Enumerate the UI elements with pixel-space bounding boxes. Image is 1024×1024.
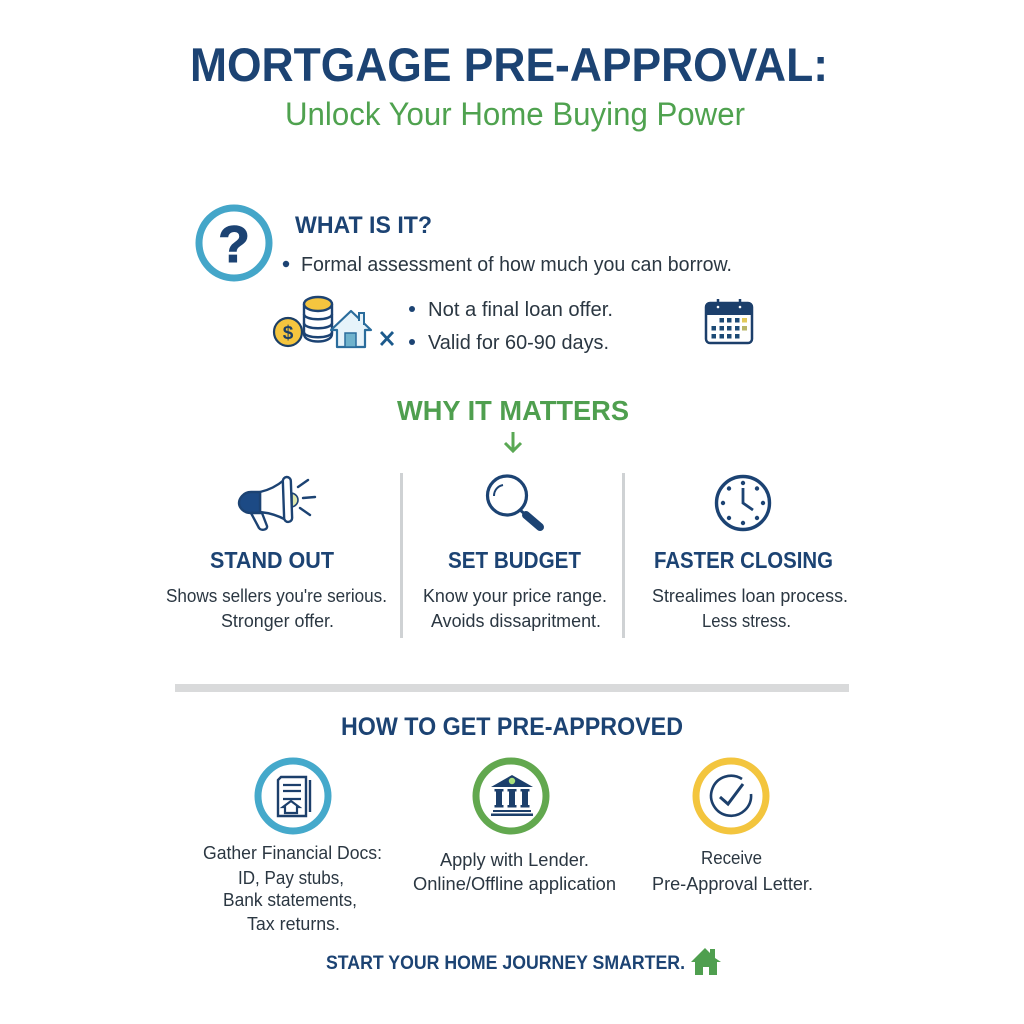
text: apply with lender: Apply with Lender. [440, 850, 589, 870]
icon: clock [716, 476, 770, 530]
step 1: gather documents [203, 761, 382, 934]
bullet: valid for 60-90 days: Valid for 60-90 days. [428, 332, 609, 354]
text: gather documents: Gather Financial Docs: [203, 843, 382, 863]
footer call to action: START YOUR HOME JOURNEY SMARTER. [326, 953, 685, 974]
step 3: receive letter [652, 761, 813, 894]
arrow: down [505, 432, 521, 451]
icon: coins, stack and house [274, 297, 371, 347]
panel: what is it [199, 208, 752, 354]
icon: cross [381, 332, 393, 345]
panel: steps [203, 761, 813, 934]
column: faster closing [652, 476, 848, 631]
text: faster closing [652, 586, 848, 631]
divider: section rule [175, 684, 849, 692]
text: apply with lender [413, 850, 616, 894]
text: stand out [166, 586, 387, 631]
icon: coins, stack and house: $ [283, 323, 294, 344]
heading: faster closing: FASTER CLOSING [654, 547, 833, 573]
heading: why it matters: WHY IT MATTERS [397, 395, 629, 426]
divider [622, 473, 625, 638]
subtitle: Unlock Your Home Buying Power [285, 96, 745, 132]
column: stand out [166, 477, 387, 631]
text: set budget: Avoids dissapritment. [431, 611, 601, 631]
text: stand out: Stronger offer. [221, 611, 334, 631]
bullet: formal assessment: Formal assessment of how much you can borrow. [301, 254, 732, 276]
icon: green house [691, 948, 721, 975]
icon: magnifier [488, 476, 540, 527]
heading: what is it: WHAT IS IT? [295, 212, 432, 239]
icon: document [258, 761, 328, 831]
heading: set budget: SET BUDGET [448, 547, 581, 573]
icon: question mark: ? [218, 216, 250, 274]
icon: check [696, 761, 766, 831]
text: set budget: Know your price range. [423, 586, 607, 606]
title: MORTGAGE PRE-APPROVAL: [190, 38, 828, 91]
divider [400, 473, 403, 638]
text: faster closing: Less stress. [702, 611, 791, 631]
text: receive letter [652, 848, 813, 894]
text: stand out: Shows sellers you're serious. [166, 586, 387, 606]
panel: why it matters columns [166, 473, 848, 638]
step 2: apply with lender [413, 761, 616, 894]
text: gather documents [203, 843, 382, 934]
text: gather documents: Bank statements, [223, 890, 357, 910]
heading: how to get pre-approved: HOW TO GET PRE-APPROVED [341, 713, 683, 741]
icon: calendar [706, 299, 752, 343]
icon: megaphone [239, 477, 315, 530]
bullet: not a final loan offer: Not a final loan offer. [428, 299, 613, 321]
text: receive letter: Receive [701, 848, 762, 868]
text: receive letter: Pre-Approval Letter. [652, 874, 813, 894]
text: gather documents: ID, Pay stubs, [238, 868, 344, 888]
text: apply with lender: Online/Offline application [413, 874, 616, 894]
text: faster closing: Strealimes loan process. [652, 586, 848, 606]
text: set budget [423, 586, 607, 631]
text: gather documents: Tax returns. [247, 914, 340, 934]
column: set budget [423, 476, 607, 631]
icon: bank [476, 761, 546, 831]
heading: stand out: STAND OUT [210, 547, 334, 573]
icon: question mark [199, 208, 269, 278]
